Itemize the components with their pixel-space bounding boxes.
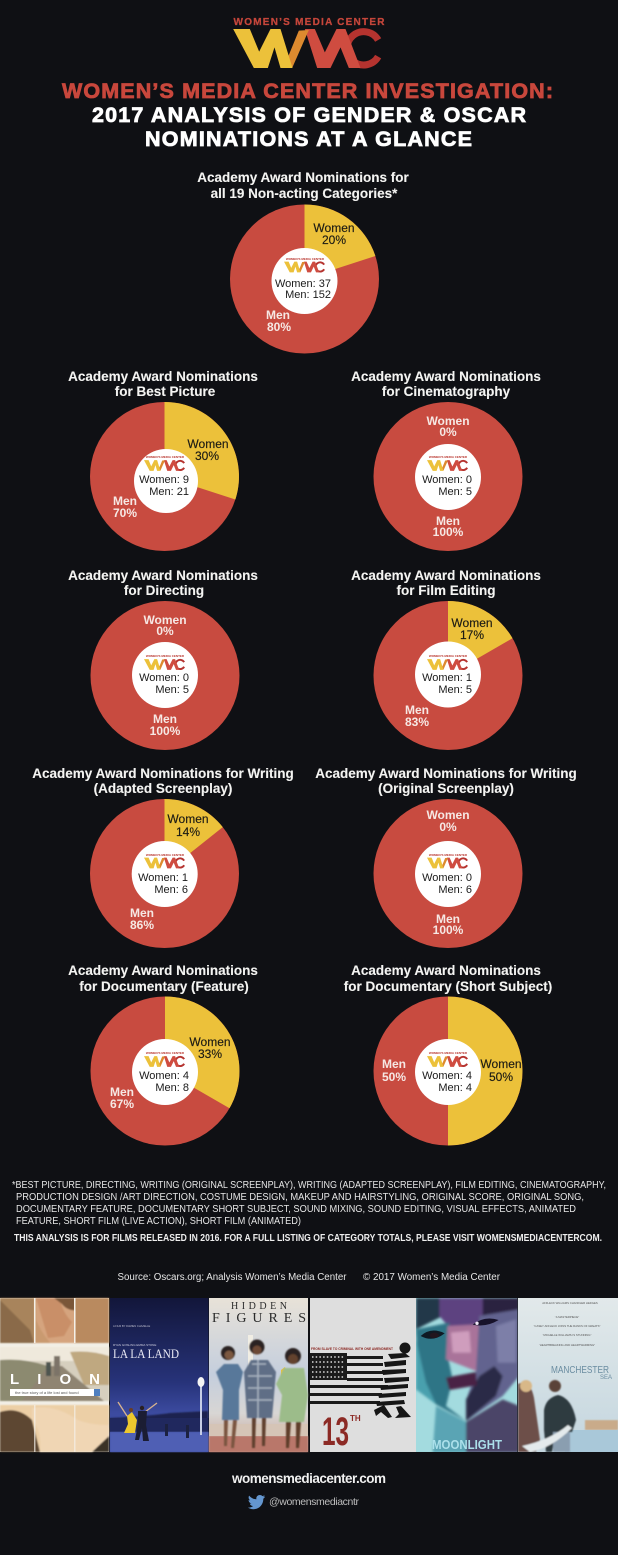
chart: documentary feature: for Documentary (Feature) xyxy=(79,979,249,994)
chart: writing original screenplay: Women: 0 xyxy=(422,872,472,884)
chart: documentary short subject xyxy=(344,963,552,1146)
chart: writing adapted screenplay: WOMEN’S MEDIA CENTER xyxy=(146,853,185,857)
chart: documentary feature: Academy Award Nominations xyxy=(68,963,258,978)
chart: cinematography: for Cinematography xyxy=(382,384,511,399)
footer: website: womensmediacenter.com xyxy=(231,1471,386,1486)
chart: writing original screenplay: Women xyxy=(426,808,470,822)
poster: 13th xyxy=(310,1298,416,1454)
chart: all 19 non-acting categories: Women: 37 xyxy=(275,278,331,290)
chart: documentary short subject: Women: 4 xyxy=(422,1070,472,1082)
chart: writing original screenplay: Academy Award Nominations for Writing xyxy=(315,766,577,781)
chart: writing original screenplay: 0% xyxy=(439,820,457,834)
chart: documentary short subject: WOMEN’S MEDIA CENTER xyxy=(429,1051,468,1055)
chart: best picture: Academy Award Nominations xyxy=(68,369,258,384)
chart: film editing: for Film Editing xyxy=(396,583,496,598)
chart: best picture xyxy=(68,369,258,551)
poster: Lion xyxy=(0,1298,109,1452)
poster: La La Land xyxy=(110,1298,208,1452)
chart: documentary short subject: Women xyxy=(480,1057,522,1071)
poster: Manchester by the Sea: “A MASTERPIECE” xyxy=(555,1315,579,1319)
chart: writing adapted screenplay: 14% xyxy=(176,825,200,839)
poster: La La Land: RYAN GOSLING EMMA STONE xyxy=(113,1343,156,1347)
footnote: category list: FEATURE, SHORT FILM (LIVE ACTION), SHORT FILM (ANIMATED) xyxy=(16,1216,301,1227)
poster: Hidden Figures xyxy=(209,1298,308,1452)
chart: directing: WOMEN’S MEDIA CENTER xyxy=(146,654,185,658)
icon: striped figure xyxy=(374,1342,411,1418)
poster: Hidden Figures: HIDDEN xyxy=(231,1301,287,1312)
chart: best picture: Women xyxy=(187,437,229,451)
title: 2017 ANALYSIS OF GENDER & OSCAR xyxy=(92,103,526,127)
chart: all 19 non-acting categories: 20% xyxy=(322,233,346,247)
chart: film editing: Women xyxy=(451,616,493,630)
chart: cinematography: 0% xyxy=(439,425,457,439)
chart: best picture: 70% xyxy=(113,506,137,520)
chart: directing: Men: 5 xyxy=(155,684,189,696)
source and copyright: © 2017 Women’s Media Center xyxy=(363,1272,501,1283)
chart: directing xyxy=(68,568,258,750)
chart: documentary feature: Women xyxy=(189,1035,231,1049)
poster: La La Land: A FILM BY DAMIEN CHAZELLE xyxy=(113,1324,151,1328)
chart: directing: for Directing xyxy=(124,583,204,598)
chart: documentary feature: 33% xyxy=(198,1047,222,1061)
icon: twitter bird xyxy=(248,1495,265,1509)
chart: writing original screenplay: Men: 6 xyxy=(438,884,472,896)
poster: Lion: LION xyxy=(10,1371,100,1388)
chart: documentary feature: WOMEN’S MEDIA CENTER xyxy=(146,1051,185,1055)
chart: documentary feature: 67% xyxy=(110,1097,134,1111)
chart: film editing: 83% xyxy=(405,715,429,729)
chart: best picture: Men xyxy=(113,494,137,508)
chart: writing adapted screenplay: Women xyxy=(167,812,209,826)
footnote: category list: PRODUCTION DESIGN /ART DIRECTION, COSTUME DESIGN, MAKEUP AND HAIRSTYLING, ORIGINAL SCORE, ORIGINAL SONG, xyxy=(16,1192,584,1203)
chart: directing: 0% xyxy=(156,624,174,638)
chart: writing original screenplay: 100% xyxy=(433,923,464,937)
source and copyright: Source: Oscars.org; Analysis Women’s Media Center xyxy=(118,1272,347,1283)
chart: writing adapted screenplay: Men xyxy=(130,906,154,920)
poster: 13th: 13 xyxy=(322,1410,349,1454)
chart: directing: Men xyxy=(153,712,177,726)
footnote: category list xyxy=(12,1180,606,1227)
chart: documentary short subject: for Documentary (Short Subject) xyxy=(344,979,552,994)
poster: Manchester by the Sea: SEA xyxy=(600,1375,612,1381)
poster: Manchester by the Sea xyxy=(518,1298,618,1452)
chart: film editing: Men: 5 xyxy=(438,684,472,696)
chart: writing adapted screenplay: (Adapted Screenplay) xyxy=(94,781,232,796)
poster: Manchester by the Sea: “CASEY AFFLECK JOINS THE RANKS OF GREATS” xyxy=(534,1324,601,1328)
chart: all 19 non-acting categories: Men: 152 xyxy=(285,289,331,301)
chart: best picture: WOMEN’S MEDIA CENTER xyxy=(146,455,185,459)
chart: cinematography: WOMEN’S MEDIA CENTER xyxy=(429,455,468,459)
source and copyright xyxy=(118,1272,501,1283)
chart: documentary short subject: Men: 4 xyxy=(438,1082,472,1094)
chart: all 19 non-acting categories: Men xyxy=(266,308,290,322)
poster: Manchester by the Sea: “MICHELLE WILLIAMS IS STUNNING” xyxy=(543,1333,591,1337)
chart: film editing: Men xyxy=(405,703,429,717)
chart: documentary short subject: 50% xyxy=(489,1070,513,1084)
chart: writing adapted screenplay: Academy Award Nominations for Writing xyxy=(32,766,294,781)
chart: documentary feature: Men xyxy=(110,1085,134,1099)
poster: Manchester by the Sea: AFFLECK WILLIAMS CHANDLER HEDGES xyxy=(542,1301,598,1305)
poster: 13th: TH xyxy=(350,1414,361,1423)
poster: Manchester by the Sea: “HEARTBREAKING AND HEARTWARMING” xyxy=(539,1343,595,1347)
chart: documentary feature xyxy=(68,963,258,1146)
poster: La La Land: LA LA LAND xyxy=(113,1346,179,1361)
footer: twitter handle: @womensmediacntr xyxy=(269,1496,360,1508)
chart: writing adapted screenplay xyxy=(32,766,294,948)
chart: documentary feature: Men: 8 xyxy=(155,1082,189,1094)
chart: cinematography: 100% xyxy=(433,525,464,539)
chart: writing original screenplay xyxy=(315,766,577,948)
chart: cinematography: Women xyxy=(426,414,470,428)
chart: best picture: 30% xyxy=(195,449,219,463)
chart: writing original screenplay: WOMEN’S MEDIA CENTER xyxy=(429,853,468,857)
chart: all 19 non-acting categories xyxy=(197,170,410,354)
chart: directing: Academy Award Nominations xyxy=(68,568,258,583)
poster: Lion: the true story of a life lost and found xyxy=(15,1390,79,1395)
chart: all 19 non-acting categories: WOMEN’S MEDIA CENTER xyxy=(286,257,325,261)
chart: best picture: Women: 9 xyxy=(139,474,189,486)
title: WOMEN’S MEDIA CENTER INVESTIGATION: xyxy=(62,79,553,103)
chart: documentary feature: Women: 4 xyxy=(139,1070,189,1082)
chart: cinematography xyxy=(351,369,541,551)
chart: film editing: Academy Award Nominations xyxy=(351,568,541,583)
chart: writing adapted screenplay: 86% xyxy=(130,918,154,932)
chart: cinematography: Women: 0 xyxy=(422,474,472,486)
title: NOMINATIONS AT A GLANCE xyxy=(145,127,472,151)
chart: film editing: Women: 1 xyxy=(422,672,472,684)
poster: Moonlight xyxy=(416,1298,519,1453)
logo: Women's Media Center xyxy=(233,17,385,68)
chart: documentary short subject: 50% xyxy=(382,1070,406,1084)
chart: documentary short subject: Men xyxy=(382,1057,406,1071)
chart: best picture: for Best Picture xyxy=(115,384,216,399)
logo: Women's Media Center: WOMEN’S MEDIA CENTER xyxy=(234,17,385,28)
chart: cinematography: Academy Award Nominations xyxy=(351,369,541,384)
chart: all 19 non-acting categories: Academy Award Nominations for xyxy=(197,170,410,185)
poster: Moonlight: MOONLIGHT xyxy=(432,1438,502,1452)
chart: all 19 non-acting categories: all 19 Non-acting Categories* xyxy=(211,186,398,201)
chart: cinematography: Men: 5 xyxy=(438,486,472,498)
chart: film editing xyxy=(351,568,541,750)
chart: writing original screenplay: (Original Screenplay) xyxy=(378,781,514,796)
chart: film editing: WOMEN’S MEDIA CENTER xyxy=(429,654,468,658)
chart: documentary short subject: Academy Award Nominations xyxy=(351,963,541,978)
chart: writing original screenplay: Men xyxy=(436,912,460,926)
chart: writing adapted screenplay: Men: 6 xyxy=(154,884,188,896)
chart: all 19 non-acting categories: 80% xyxy=(267,320,291,334)
poster: Hidden Figures: FIGURES xyxy=(212,1311,306,1326)
footnote: category list: DOCUMENTARY FEATURE, DOCUMENTARY SHORT SUBJECT, SOUND MIXING, SOUND EDITING, VISUAL EFFECTS, ANIMATED xyxy=(16,1204,576,1215)
chart: film editing: 17% xyxy=(460,628,484,642)
chart: directing: Women xyxy=(143,613,187,627)
chart: best picture: Men: 21 xyxy=(149,486,189,498)
title xyxy=(62,79,553,151)
chart: cinematography: Men xyxy=(436,514,460,528)
chart: directing: 100% xyxy=(150,724,181,738)
poster: 13th: FROM SLAVE TO CRIMINAL WITH ONE AMENDMENT xyxy=(311,1347,394,1351)
chart: writing adapted screenplay: Women: 1 xyxy=(138,872,188,884)
chart: all 19 non-acting categories: Women xyxy=(313,221,355,235)
chart: directing: Women: 0 xyxy=(139,672,189,684)
